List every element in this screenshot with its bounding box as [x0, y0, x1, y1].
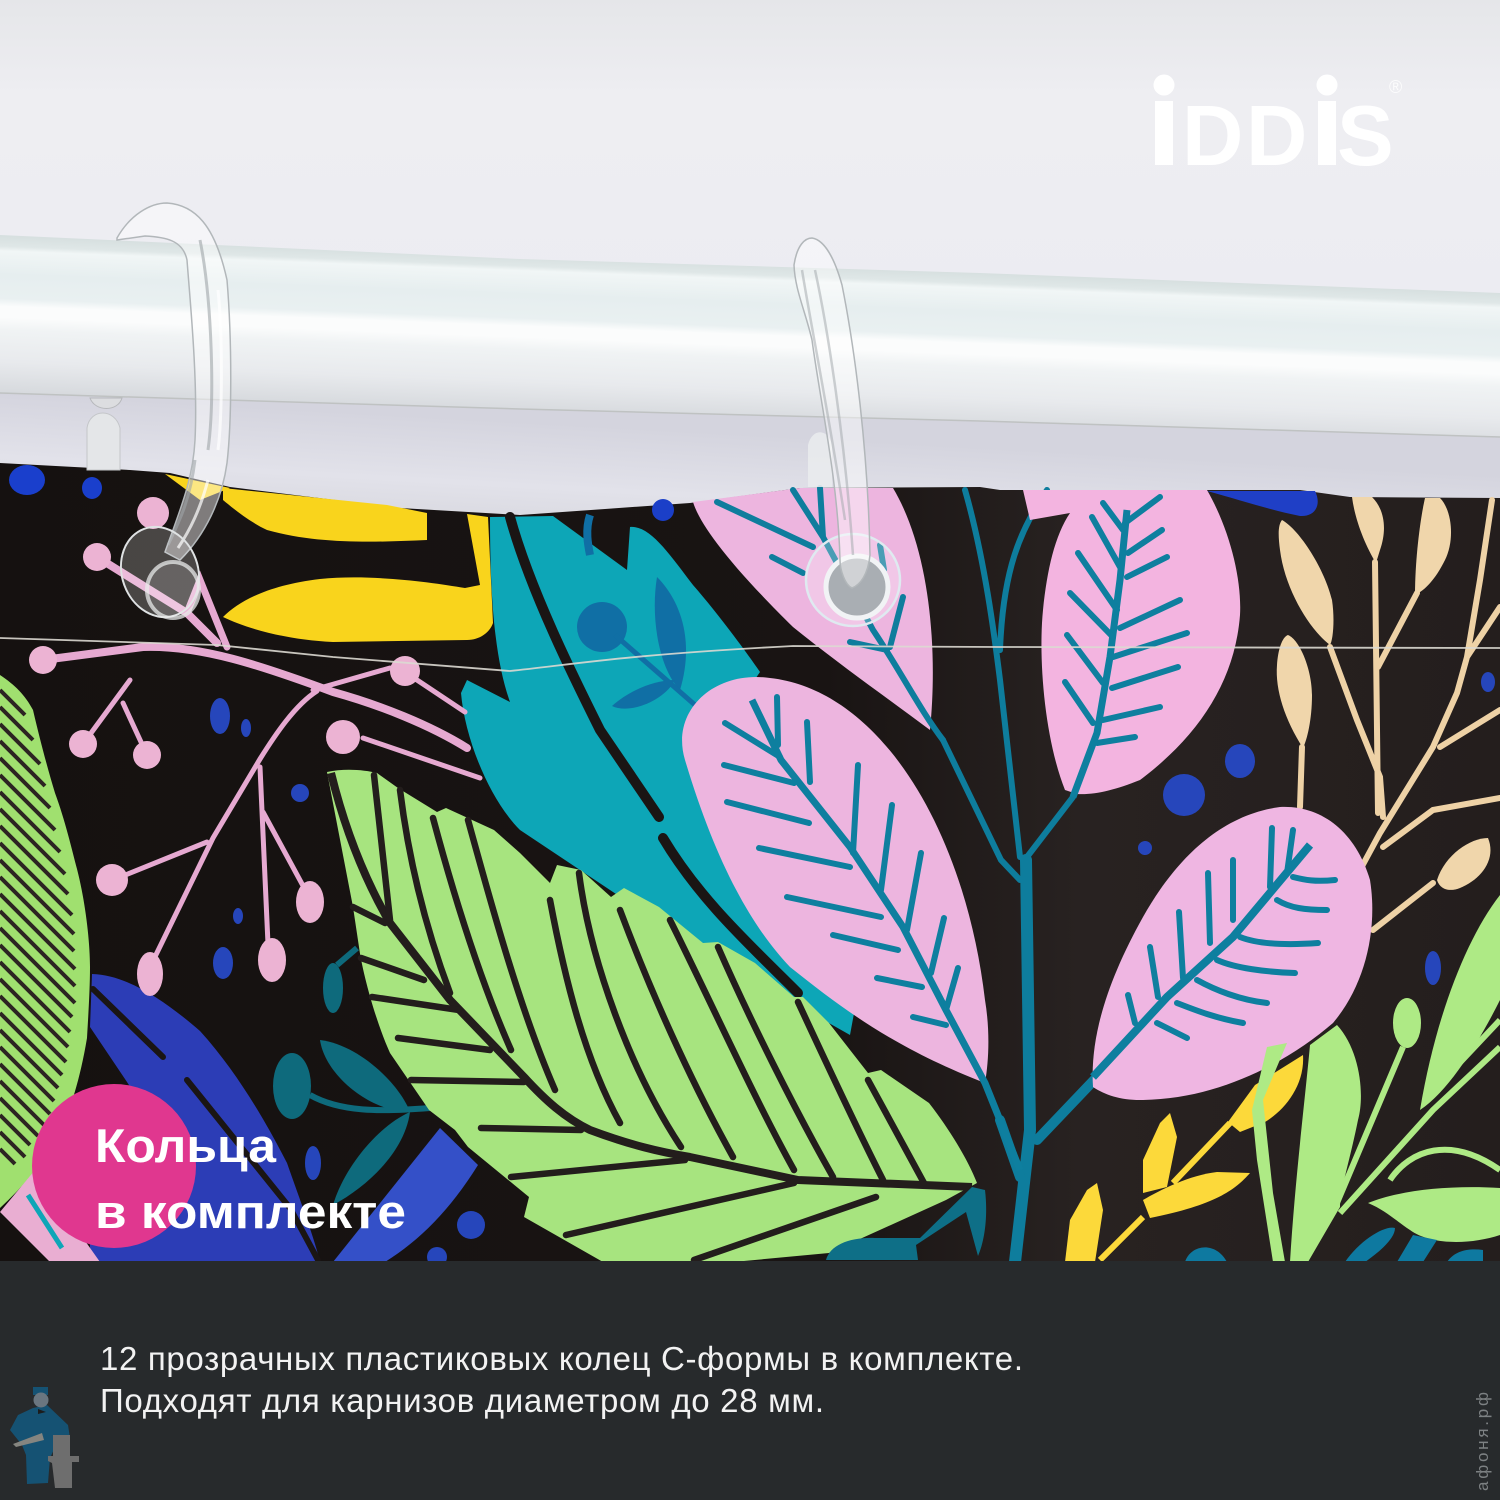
footer description: Подходят для карнизов диаметром до 28 мм. — [100, 1382, 824, 1419]
teal plant stems — [943, 490, 1097, 1262]
logo iddis: iDDiS — [1150, 89, 1394, 184]
right green foliage — [1252, 895, 1500, 1262]
badge heading: Кольца — [95, 1119, 277, 1172]
badge heading — [95, 1119, 406, 1238]
vertical watermark: афоня.рф — [1473, 1392, 1492, 1491]
pink leaf centre — [682, 677, 1020, 1170]
left peg — [87, 398, 122, 470]
blue leaf — [90, 974, 320, 1262]
teal blobs bottom — [1185, 1228, 1483, 1262]
pink corner shape — [0, 1170, 100, 1262]
clear ring centre — [794, 238, 900, 626]
pink circle badge — [32, 1084, 196, 1248]
pink leaf lower right — [1093, 807, 1372, 1100]
yellow flower — [165, 474, 493, 642]
teal bud bottom — [826, 1187, 986, 1260]
blue dots — [9, 465, 1495, 1267]
tulip dark veins — [510, 517, 798, 993]
grommet centre — [806, 534, 900, 626]
footer band — [0, 1261, 1500, 1500]
beige branches — [1300, 500, 1500, 930]
tulip inner flower — [577, 515, 695, 709]
yellow sprig — [1065, 1055, 1303, 1262]
pink leaf top centre — [693, 488, 943, 740]
curtain fabric with botanical print — [0, 463, 1500, 1267]
teal tulip — [461, 516, 855, 1035]
big green leaf — [327, 770, 977, 1262]
pink leaf top right — [1023, 490, 1240, 797]
left green leaf — [0, 675, 90, 1208]
clear ring left — [109, 203, 231, 628]
footer description: 12 прозрачных пластиковых колец С-формы в комплекте. — [100, 1340, 1023, 1377]
registered mark: ® — [1389, 77, 1402, 97]
background wall — [0, 0, 1500, 320]
shower curtain rod — [0, 235, 1500, 437]
grommet left — [109, 516, 211, 628]
beige leaves — [1277, 497, 1490, 890]
dark teal sprig — [273, 948, 430, 1205]
plumber watermark icon — [10, 1387, 79, 1488]
shadow area under rod — [0, 380, 1500, 540]
blue top shape — [1207, 491, 1318, 516]
seam stitching — [0, 638, 1500, 671]
footer description — [100, 1340, 1023, 1419]
pink branches — [43, 557, 480, 967]
centre peg — [808, 432, 832, 487]
blue band — [333, 1128, 478, 1262]
badge heading: в комплекте — [95, 1185, 406, 1238]
pink berries — [29, 497, 420, 996]
